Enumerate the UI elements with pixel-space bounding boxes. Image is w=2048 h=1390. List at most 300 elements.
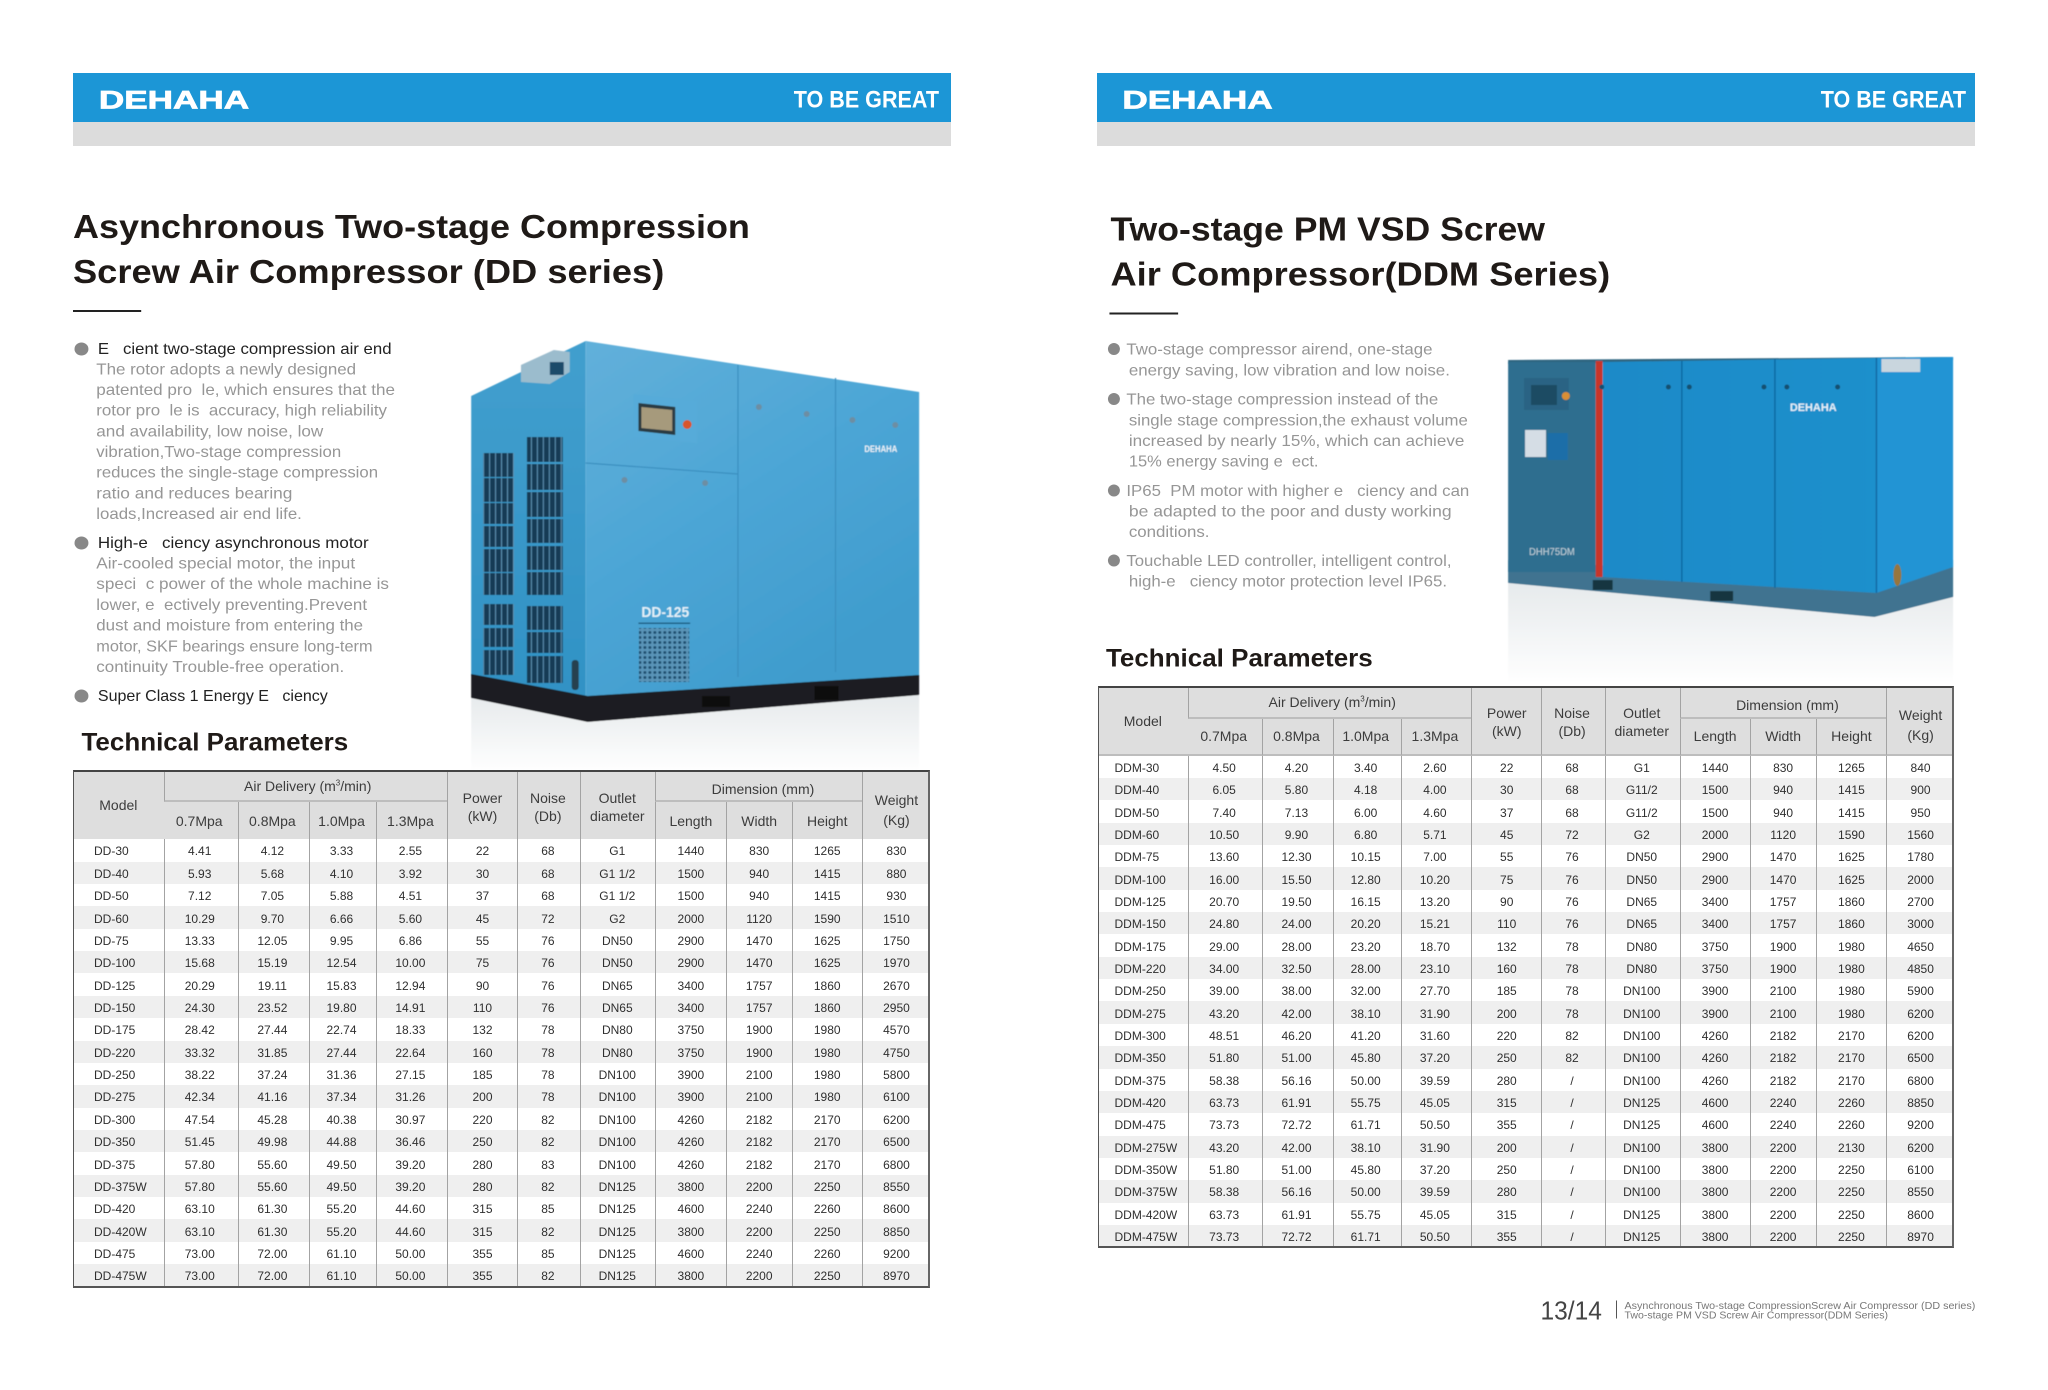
table body: DN65 <box>602 979 633 993</box>
table body: 30 <box>1500 783 1513 797</box>
feature: air end: E cient two-stage compression air end <box>98 341 392 358</box>
table body: 78 <box>541 1068 555 1082</box>
table body: 1757 <box>1770 895 1796 909</box>
table body: 12.30 <box>1281 850 1312 864</box>
table body: 78 <box>1565 940 1579 954</box>
feature list <box>74 341 395 705</box>
table body: 4600 <box>1702 1096 1728 1110</box>
table header <box>1099 688 1952 756</box>
table body: 82 <box>1565 1029 1579 1043</box>
table body: 3800 <box>1702 1141 1728 1155</box>
table body: 76 <box>1565 895 1579 909</box>
table body: 8600 <box>1907 1208 1934 1222</box>
table body: 75 <box>476 956 489 970</box>
table body: DN100 <box>1623 1074 1660 1088</box>
table body: 2250 <box>1838 1185 1865 1199</box>
table header: 0.8Mpa <box>1273 728 1320 744</box>
table body: 6100 <box>1907 1163 1934 1177</box>
table body: 280 <box>472 1158 493 1172</box>
table body: DN50 <box>1626 873 1657 887</box>
table header: Height <box>807 813 847 829</box>
table body: 58.38 <box>1209 1185 1239 1199</box>
table body: DDM-250 <box>1114 984 1166 998</box>
table header: Model <box>1124 713 1162 729</box>
table body: 6200 <box>1907 1141 1934 1155</box>
table body: DN100 <box>1623 1141 1660 1155</box>
table body: G11/2 <box>1626 783 1658 797</box>
table body: 51.00 <box>1281 1163 1312 1177</box>
table body: 2170 <box>1838 1029 1865 1043</box>
table body: 3900 <box>678 1090 704 1104</box>
table body: DN50 <box>602 956 633 970</box>
table body: 4.50 <box>1212 761 1236 775</box>
table body: 8850 <box>1907 1096 1934 1110</box>
table body: 355 <box>472 1247 493 1261</box>
table body: 2170 <box>1838 1051 1865 1065</box>
heading: technical parameters: Technical Parameters <box>81 728 348 757</box>
table body: 160 <box>472 1046 493 1060</box>
table body: 38.10 <box>1351 1007 1381 1021</box>
table body: 160 <box>1497 962 1517 976</box>
table body: 37.20 <box>1420 1051 1450 1065</box>
table body: DN100 <box>1623 1051 1660 1065</box>
table body: DDM-275 <box>1114 1007 1166 1021</box>
table body: 68 <box>1565 806 1579 820</box>
table body: 19.80 <box>326 1001 357 1015</box>
title: Air Compressor(DDM Series) <box>1110 255 1610 293</box>
table header: (kW) <box>468 808 497 824</box>
table body: 940 <box>1773 783 1793 797</box>
table body: 4.51 <box>399 889 422 903</box>
table body: 9200 <box>1907 1118 1934 1132</box>
feature: motor: High-e ciency asynchronous motor <box>98 535 369 552</box>
table body: 32.00 <box>1351 984 1381 998</box>
title: Screw Air Compressor (DD series) <box>73 253 664 290</box>
table body: DD-275 <box>94 1090 135 1104</box>
table body: DDM-350W <box>1114 1163 1177 1177</box>
table body: 8550 <box>883 1180 910 1194</box>
table body: 1265 <box>814 844 841 858</box>
table body: 220 <box>472 1113 493 1127</box>
table header: Model <box>99 797 137 813</box>
table body: 2250 <box>1838 1163 1865 1177</box>
table body: 4260 <box>1702 1051 1728 1065</box>
table body: 7.12 <box>188 889 211 903</box>
table body: 4.18 <box>1354 783 1377 797</box>
table body: 68 <box>541 867 555 881</box>
table header: Length <box>1694 728 1736 744</box>
table body: 41.20 <box>1351 1029 1381 1043</box>
table body: 20.20 <box>1351 917 1381 931</box>
table body: DDM-150 <box>1114 917 1166 931</box>
table body: DD-375W <box>94 1180 147 1194</box>
table body: 82 <box>541 1225 555 1239</box>
feature: air end: patented pro le, which ensures that the <box>96 382 395 399</box>
table body: 5.68 <box>261 867 284 881</box>
table body: G1 1/2 <box>599 889 635 903</box>
table body: / <box>1570 1141 1574 1155</box>
table body: 24.00 <box>1281 917 1312 931</box>
table body: 9200 <box>883 1247 910 1261</box>
table body: 1415 <box>1838 806 1865 820</box>
table header: (Kg) <box>1907 727 1934 743</box>
table body: 1415 <box>1838 783 1865 797</box>
table body: DDM-300 <box>1114 1029 1166 1043</box>
table body: 2130 <box>1838 1141 1865 1155</box>
table body: / <box>1570 1230 1574 1244</box>
feature: LED controller: high-e ciency motor protection level IP65. <box>1129 573 1447 591</box>
table body: 220 <box>1497 1029 1517 1043</box>
table body: DN80 <box>1626 962 1657 976</box>
table body: 31.90 <box>1420 1141 1450 1155</box>
table body: 4260 <box>678 1158 704 1172</box>
table body: DN80 <box>1626 940 1657 954</box>
table body: 45 <box>476 912 489 926</box>
table header: (kW) <box>1492 723 1521 739</box>
table body: DD-420 <box>94 1202 135 1216</box>
table body: 250 <box>472 1135 493 1149</box>
table body: 78 <box>541 1023 555 1037</box>
table body: 3400 <box>1702 917 1728 931</box>
table body: / <box>1570 1096 1574 1110</box>
table body: 39.00 <box>1209 984 1239 998</box>
table body: 31.60 <box>1420 1029 1450 1043</box>
table body: 85 <box>541 1247 555 1261</box>
table body: 19.50 <box>1281 895 1312 909</box>
table body: 1590 <box>1838 828 1865 842</box>
table body: 78 <box>1565 1007 1579 1021</box>
table body: 10.15 <box>1351 850 1381 864</box>
table body: 28.42 <box>185 1023 215 1037</box>
table body: 2900 <box>678 956 704 970</box>
table header: 1.0Mpa <box>1342 728 1389 744</box>
table body: G1 <box>609 844 625 858</box>
heading: technical parameters: Technical Parameters <box>1106 644 1373 673</box>
feature: LED controller: Touchable LED controller, intelligent control, <box>1126 553 1451 570</box>
table body: 8970 <box>883 1269 910 1283</box>
table body: DD-350 <box>94 1135 135 1149</box>
table body: 1860 <box>814 979 841 993</box>
feature: exhaust volume: 15% energy saving e ect. <box>1129 453 1318 471</box>
table body: 4850 <box>1907 962 1934 976</box>
table body: 41.16 <box>257 1090 287 1104</box>
table body: 1625 <box>814 956 841 970</box>
table body: 1980 <box>814 1023 841 1037</box>
table body: 61.10 <box>326 1247 357 1261</box>
feature: motor: speci c power of the whole machine is <box>96 576 389 593</box>
table body: 200 <box>472 1090 493 1104</box>
feature: air end: vibration,Two-stage compression <box>96 444 341 461</box>
table body: 2100 <box>746 1090 773 1104</box>
table body: 15.83 <box>326 979 357 993</box>
table body: DN125 <box>599 1225 636 1239</box>
table body: 830 <box>749 844 769 858</box>
table body: G11/2 <box>1626 806 1658 820</box>
table body: 19.11 <box>258 979 287 993</box>
table body: DN100 <box>599 1135 636 1149</box>
table body: 2200 <box>1770 1163 1796 1177</box>
table header: 1.3Mpa <box>1412 728 1458 744</box>
table body: 2170 <box>1838 1074 1865 1088</box>
table header: Air Delivery (m3/min) <box>1269 694 1396 710</box>
table body: 23.10 <box>1420 962 1450 976</box>
table body: 39.20 <box>395 1158 425 1172</box>
feature: LED controller <box>1108 553 1451 591</box>
feature: IP65 motor: conditions. <box>1129 524 1209 541</box>
table body: DN125 <box>599 1247 636 1261</box>
table body: 315 <box>1497 1096 1517 1110</box>
table body: 31.36 <box>326 1068 357 1082</box>
table body: 9.95 <box>330 934 353 948</box>
table body: 8850 <box>883 1225 910 1239</box>
table body: DN125 <box>599 1180 636 1194</box>
feature: exhaust volume: The two-stage compression instead of the <box>1126 391 1438 409</box>
table body: 2000 <box>678 912 704 926</box>
table body: DDM-420W <box>1114 1208 1177 1222</box>
table body: 7.05 <box>261 889 284 903</box>
table header: diameter <box>590 808 645 824</box>
table body: 2240 <box>1770 1118 1796 1132</box>
table body: 45.05 <box>1420 1096 1450 1110</box>
table body: 200 <box>1497 1007 1517 1021</box>
title: Asynchronous Two-stage Compression <box>73 208 750 245</box>
table body: 6500 <box>883 1135 910 1149</box>
table body: 2260 <box>814 1202 841 1216</box>
table body: 68 <box>1565 783 1579 797</box>
compressor illustration DD-125 <box>471 341 919 772</box>
table body: 1860 <box>814 1001 841 1015</box>
table header: Weight <box>1899 707 1942 723</box>
table body: 72.00 <box>257 1269 287 1283</box>
table body: 50.00 <box>1351 1074 1381 1088</box>
table body: DDM-50 <box>1114 806 1159 820</box>
table body: 13.60 <box>1209 850 1239 864</box>
table body: 12.05 <box>257 934 287 948</box>
table body: 1900 <box>1770 962 1796 976</box>
table body: 10.20 <box>1420 873 1450 887</box>
table body: 15.21 <box>1420 917 1450 931</box>
table body: DDM-30 <box>1114 761 1159 775</box>
table body: 1980 <box>1838 962 1865 976</box>
table body: 250 <box>1497 1051 1517 1065</box>
table body: 39.59 <box>1420 1185 1450 1199</box>
table header: Outlet <box>599 790 636 806</box>
table body: 3.33 <box>330 844 353 858</box>
table body: 58.38 <box>1209 1074 1239 1088</box>
table body: 940 <box>749 867 769 881</box>
table body: 3.40 <box>1354 761 1377 775</box>
feature: energy class: Super Class 1 Energy E ciency <box>98 688 328 705</box>
table body: DD-30 <box>94 844 129 858</box>
table body: 13.33 <box>185 934 215 948</box>
table body: G1 <box>1634 761 1650 775</box>
table body: 4650 <box>1907 940 1934 954</box>
table body: 90 <box>476 979 489 993</box>
table body: 46.20 <box>1281 1029 1312 1043</box>
table body: 355 <box>1497 1230 1517 1244</box>
table body: 34.00 <box>1209 962 1239 976</box>
table body: DN100 <box>1623 1007 1660 1021</box>
table body: 355 <box>472 1269 493 1283</box>
panel: DD series page <box>73 73 951 1288</box>
table body: 73.73 <box>1209 1230 1239 1244</box>
table body: 76 <box>1565 873 1579 887</box>
table body: 840 <box>1911 761 1931 775</box>
table body: 44.60 <box>395 1202 425 1216</box>
table body: DN65 <box>1626 895 1657 909</box>
table body: 3400 <box>1702 895 1728 909</box>
table body: 1120 <box>746 912 772 926</box>
table body: 3800 <box>1702 1185 1728 1199</box>
table body: 3900 <box>1702 1007 1728 1021</box>
table body: 38.00 <box>1281 984 1312 998</box>
table body: DD-125 <box>94 979 135 993</box>
table body: DN125 <box>1623 1208 1660 1222</box>
table body: 57.80 <box>185 1180 215 1194</box>
table body <box>1099 756 1952 1246</box>
table body: 6800 <box>1907 1074 1934 1088</box>
table body: 51.80 <box>1209 1051 1239 1065</box>
table body: 2900 <box>678 934 704 948</box>
table body: 31.90 <box>1420 1007 1450 1021</box>
table body: 3900 <box>1702 984 1728 998</box>
table body: 72.00 <box>257 1247 287 1261</box>
table body: 82 <box>541 1180 555 1194</box>
table body: 15.50 <box>1281 873 1312 887</box>
header band <box>1097 73 1975 146</box>
table header: Power <box>463 790 502 806</box>
footer: page number and caption <box>1540 1298 1975 1322</box>
table body: 7.13 <box>1285 806 1308 820</box>
table body: 28.00 <box>1281 940 1312 954</box>
feature: air end: rotor pro le is accuracy, high reliability <box>96 402 387 420</box>
table body: 5.80 <box>1285 783 1308 797</box>
table body: 2182 <box>1770 1029 1796 1043</box>
table body: 27.70 <box>1420 984 1450 998</box>
table body: 2260 <box>1838 1118 1865 1132</box>
feature: two-stage airend: Two-stage compressor airend, one-stage <box>1126 341 1433 359</box>
table body: 61.91 <box>1281 1208 1312 1222</box>
table body: DN80 <box>602 1046 633 1060</box>
table body: 1980 <box>814 1046 841 1060</box>
table body: 73.00 <box>185 1269 215 1283</box>
table body: 1265 <box>1838 761 1865 775</box>
table body: 78 <box>1565 962 1579 976</box>
table body: 28.00 <box>1351 962 1381 976</box>
table body: 56.16 <box>1281 1185 1312 1199</box>
table body: 76 <box>541 956 555 970</box>
feature list <box>1108 341 1469 591</box>
table body: 38.10 <box>1351 1141 1381 1155</box>
table body: 56.16 <box>1281 1074 1312 1088</box>
table header: Width <box>741 813 777 829</box>
table body: 2200 <box>1770 1141 1796 1155</box>
table body: 2182 <box>1770 1051 1796 1065</box>
table body: DN65 <box>602 1001 633 1015</box>
table body: 185 <box>1497 984 1517 998</box>
table body: 132 <box>1497 940 1517 954</box>
feature: air end: reduces the single-stage compression <box>96 464 378 482</box>
table body: DD-100 <box>94 956 135 970</box>
table body: 45.80 <box>1351 1163 1381 1177</box>
table body: 3400 <box>678 1001 704 1015</box>
table header: Dimension (mm) <box>712 781 814 797</box>
table body: 2100 <box>1770 1007 1796 1021</box>
table body: 44.60 <box>395 1225 425 1239</box>
table body: 1900 <box>746 1023 773 1037</box>
table body: DDM-40 <box>1114 783 1159 797</box>
table body: 51.45 <box>185 1135 215 1149</box>
table body: 31.85 <box>257 1046 287 1060</box>
table header: 1.3Mpa <box>387 813 434 829</box>
table body: DN80 <box>602 1023 633 1037</box>
table body: 27.44 <box>257 1023 287 1037</box>
table body: 10.50 <box>1209 828 1239 842</box>
feature: exhaust volume: increased by nearly 15%, which can achieve <box>1129 433 1464 450</box>
table body: 29.00 <box>1209 940 1239 954</box>
table body: DN100 <box>1623 984 1660 998</box>
table body: / <box>1570 1163 1574 1177</box>
table body: 76 <box>541 979 555 993</box>
table body: DDM-375W <box>1114 1185 1177 1199</box>
table body: DDM-220 <box>1114 962 1166 976</box>
table body: 75 <box>1500 873 1513 887</box>
table body: 55.75 <box>1351 1096 1381 1110</box>
table body: 18.70 <box>1420 940 1450 954</box>
table body: 55.20 <box>326 1225 357 1239</box>
table body: DD-75 <box>94 934 129 948</box>
table body: 315 <box>472 1202 493 1216</box>
table body: 1500 <box>678 867 704 881</box>
table body: 51.80 <box>1209 1163 1239 1177</box>
table body: 33.32 <box>185 1046 215 1060</box>
table body: 2250 <box>814 1225 841 1239</box>
table body: 30 <box>476 867 489 881</box>
table body: 1415 <box>814 889 841 903</box>
table header: diameter <box>1615 723 1669 739</box>
table body: 68 <box>1565 761 1579 775</box>
table body: 8970 <box>1907 1230 1934 1244</box>
table body: 7.40 <box>1212 806 1236 820</box>
table body: 1757 <box>1770 917 1796 931</box>
table body: 37.20 <box>1420 1163 1450 1177</box>
table body: 73.00 <box>185 1247 215 1261</box>
table body: 9.70 <box>261 912 284 926</box>
table body: 24.80 <box>1209 917 1239 931</box>
table body: 73.73 <box>1209 1118 1239 1132</box>
table body: 3800 <box>678 1269 704 1283</box>
table header: Noise <box>1554 705 1590 721</box>
table body: 61.91 <box>1281 1096 1312 1110</box>
table body: 22.74 <box>326 1023 357 1037</box>
table body: 22 <box>1500 761 1513 775</box>
table body: 1980 <box>814 1068 841 1082</box>
table body: 2240 <box>1770 1096 1796 1110</box>
table body: DN100 <box>1623 1163 1660 1177</box>
table body: 43.20 <box>1209 1141 1239 1155</box>
table body: 4570 <box>883 1023 910 1037</box>
table body: 3900 <box>678 1068 704 1082</box>
table body: 4600 <box>1702 1118 1728 1132</box>
feature: two-stage airend: energy saving, low vibration and low noise. <box>1129 362 1450 380</box>
table header: (Kg) <box>883 812 910 828</box>
table body: 1860 <box>1838 895 1865 909</box>
compressor illustration DHH75DM: DHH75DM <box>1529 547 1575 558</box>
table body: 2700 <box>1907 895 1934 909</box>
table body: 57.80 <box>185 1158 215 1172</box>
table body: 20.29 <box>185 979 215 993</box>
feature: motor: motor, SKF bearings ensure long-term <box>96 638 373 656</box>
